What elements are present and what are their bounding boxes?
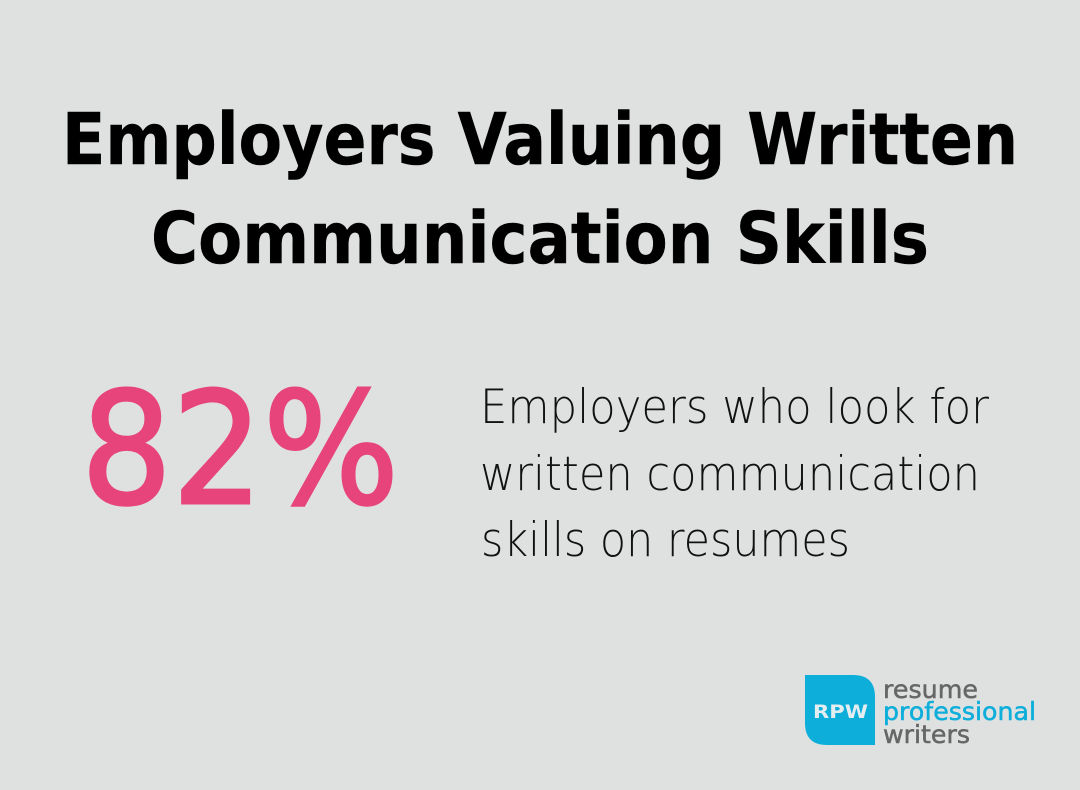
- statistic description: skills on resumes: [481, 513, 850, 568]
- logo wordmark: writers: [883, 720, 970, 749]
- title: [62, 98, 1018, 280]
- statistic description: [480, 380, 990, 568]
- logo wordmark: professional: [883, 697, 1036, 726]
- statistic: 82%: 82%: [81, 359, 399, 540]
- logo wordmark: [883, 675, 1036, 749]
- statistic description: written communication: [480, 447, 980, 502]
- statistic description: Employers who look for: [480, 380, 990, 435]
- logo: resume professional writers: [805, 675, 1036, 749]
- logo badge initials: RPW: [813, 701, 868, 723]
- title: Communication Skills: [151, 197, 929, 280]
- logo badge: [805, 675, 875, 745]
- logo wordmark: resume: [883, 675, 978, 704]
